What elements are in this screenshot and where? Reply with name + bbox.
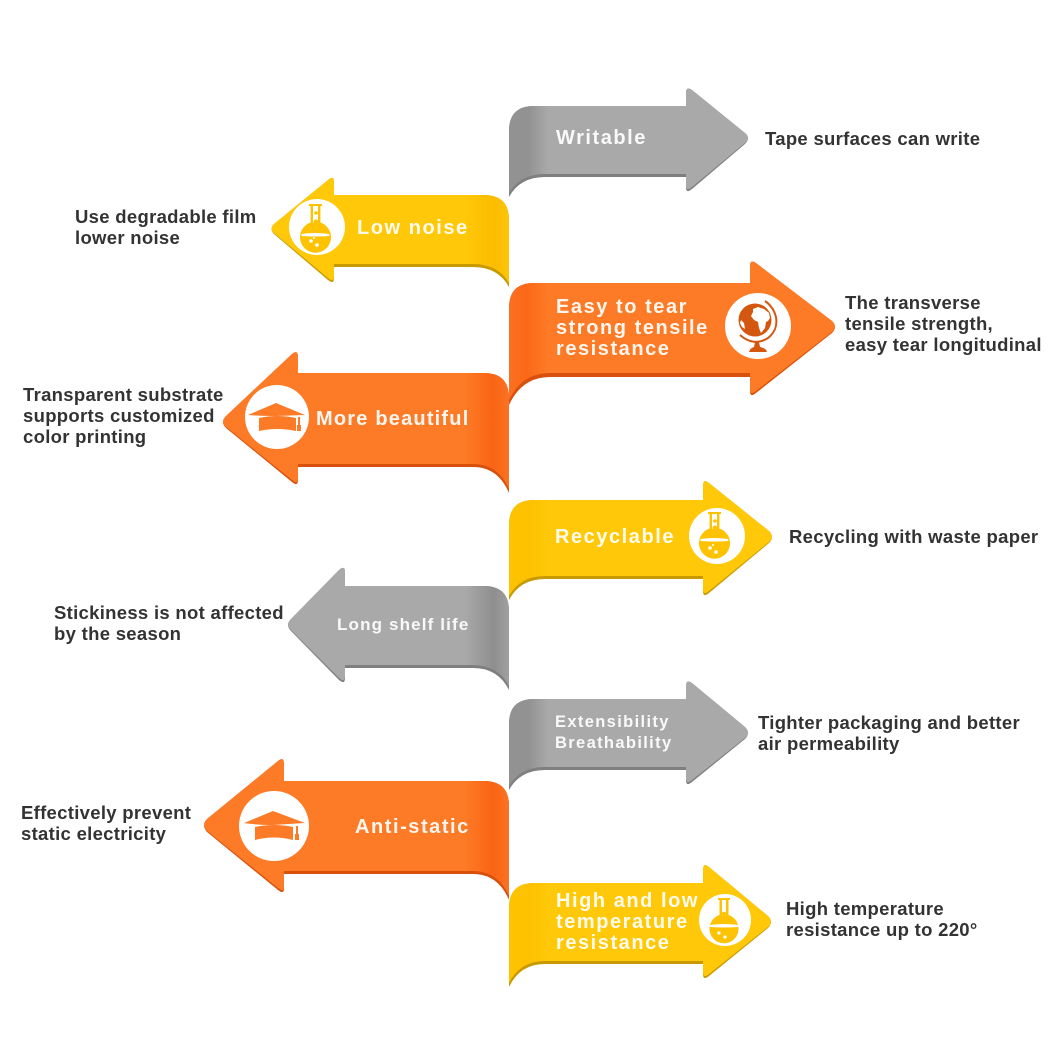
label: Extensibility Breathability: Breathability bbox=[555, 734, 672, 752]
icon: flask bbox=[699, 894, 751, 946]
arrow: Writable bbox=[509, 89, 748, 197]
description: Transparent substrate: Transparent substrate bbox=[23, 384, 224, 405]
icon: graduation cap bbox=[239, 791, 309, 861]
arrow: Recyclable bbox=[509, 481, 772, 600]
icon: flask bbox=[689, 508, 745, 564]
label: Low noise: Low noise bbox=[357, 217, 469, 239]
description: The transverse tensile strength bbox=[845, 292, 1042, 355]
label: Easy to tear strong tensile resistance: resistance bbox=[556, 338, 670, 360]
label: Easy to tear strong tensile resistance: Easy to tear bbox=[556, 296, 688, 318]
label: Writable: Writable bbox=[556, 127, 647, 149]
label: High and low temperature resistance: temperature bbox=[556, 911, 689, 933]
label: High and low temperature resistance: resistance bbox=[556, 932, 670, 954]
description: High temperature: High temperature bbox=[786, 898, 944, 919]
arrow: Anti-static bbox=[204, 759, 509, 900]
description: Use degradable film: Use degradable film bbox=[75, 206, 257, 227]
description: Effectively prevent bbox=[21, 802, 191, 844]
icon: flask bbox=[289, 199, 345, 255]
icon: globe bbox=[725, 293, 791, 359]
description: Stickiness is not affected: Stickiness is not affected bbox=[54, 602, 284, 623]
arrow: More beautiful bbox=[223, 352, 509, 493]
description: Use degradable film bbox=[75, 206, 257, 248]
label: More beautiful: More beautiful bbox=[316, 408, 469, 430]
description: Tighter packaging: air permeability bbox=[758, 733, 900, 754]
description: The transverse tensile strength: tensile strength, bbox=[845, 313, 993, 334]
description: The transverse tensile strength: The transverse bbox=[845, 292, 981, 313]
description: Effectively prevent: Effectively prevent bbox=[21, 802, 191, 823]
description: Recycling with waste paper: Recycling with waste paper bbox=[789, 526, 1038, 547]
description: Effectively prevent: static electricity bbox=[21, 823, 167, 844]
label: Extensibility Breathability: Extensibility bbox=[555, 713, 670, 731]
description: High temperature bbox=[786, 898, 978, 940]
description: Tighter packaging bbox=[758, 712, 1020, 754]
arrow: High and low temperature resistance bbox=[509, 865, 771, 987]
description: Transparent substrate: color printing bbox=[23, 426, 146, 447]
description: Stickiness is not affected: by the season bbox=[54, 623, 181, 644]
description: Use degradable film: lower noise bbox=[75, 227, 180, 248]
label: Easy to tear strong tensile resistance: strong tensile bbox=[556, 317, 709, 339]
description: Transparent substrate: supports customized bbox=[23, 405, 215, 426]
arrow: Extensibility Breathability bbox=[509, 682, 748, 790]
description: Transparent substrate bbox=[23, 384, 224, 447]
description: Stickiness is not affected bbox=[54, 602, 284, 644]
label: Anti-static: Anti-static bbox=[355, 816, 470, 838]
arrow: Long shelf life bbox=[288, 568, 509, 690]
icon: graduation cap bbox=[245, 385, 309, 449]
description: The transverse tensile strength: easy tear longitudinal bbox=[845, 334, 1042, 355]
label: High and low temperature resistance: High and low bbox=[556, 890, 699, 912]
description: Tighter packaging: Tighter packaging and better bbox=[758, 712, 1020, 733]
description: Tape surfaces can write: Tape surfaces can write bbox=[765, 128, 980, 149]
description: High temperature: resistance up to 220° bbox=[786, 919, 978, 940]
arrow: Low noise bbox=[272, 178, 509, 287]
label: Recyclable: Recyclable bbox=[555, 526, 675, 548]
arrow: Easy to tear bbox=[509, 262, 835, 405]
label: Long shelf life: Long shelf life bbox=[337, 615, 469, 634]
